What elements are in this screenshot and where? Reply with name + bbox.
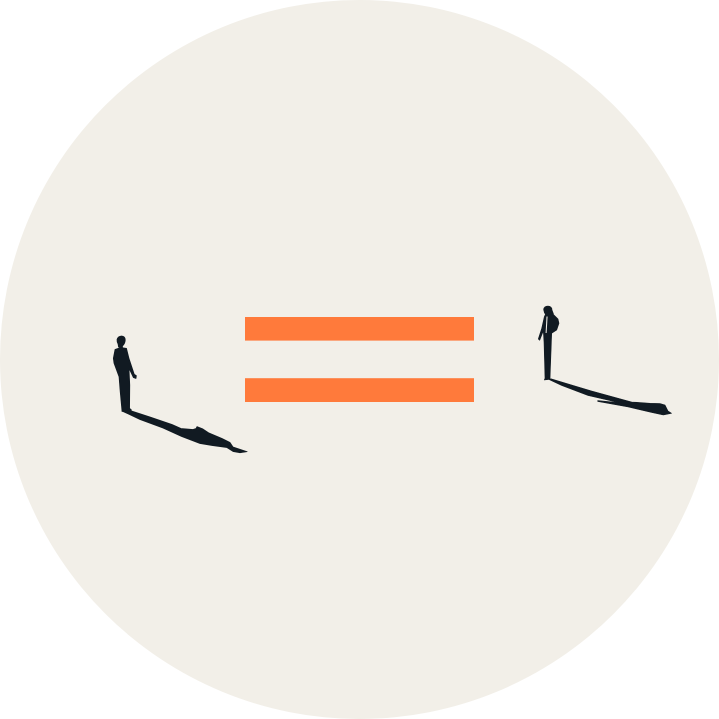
woman body and hair [538, 310, 559, 380]
figure: man with shadow [113, 336, 247, 453]
equals sign [245, 317, 474, 402]
woman shadow [549, 379, 672, 415]
man shadow [123, 410, 247, 453]
man head [117, 336, 125, 348]
man body [113, 348, 136, 412]
woman head [544, 306, 554, 317]
top bar of equals sign [245, 317, 474, 341]
bottom bar of equals sign [245, 378, 474, 402]
figure: woman with shadow [538, 306, 672, 415]
woman shirt highlight [546, 316, 548, 333]
